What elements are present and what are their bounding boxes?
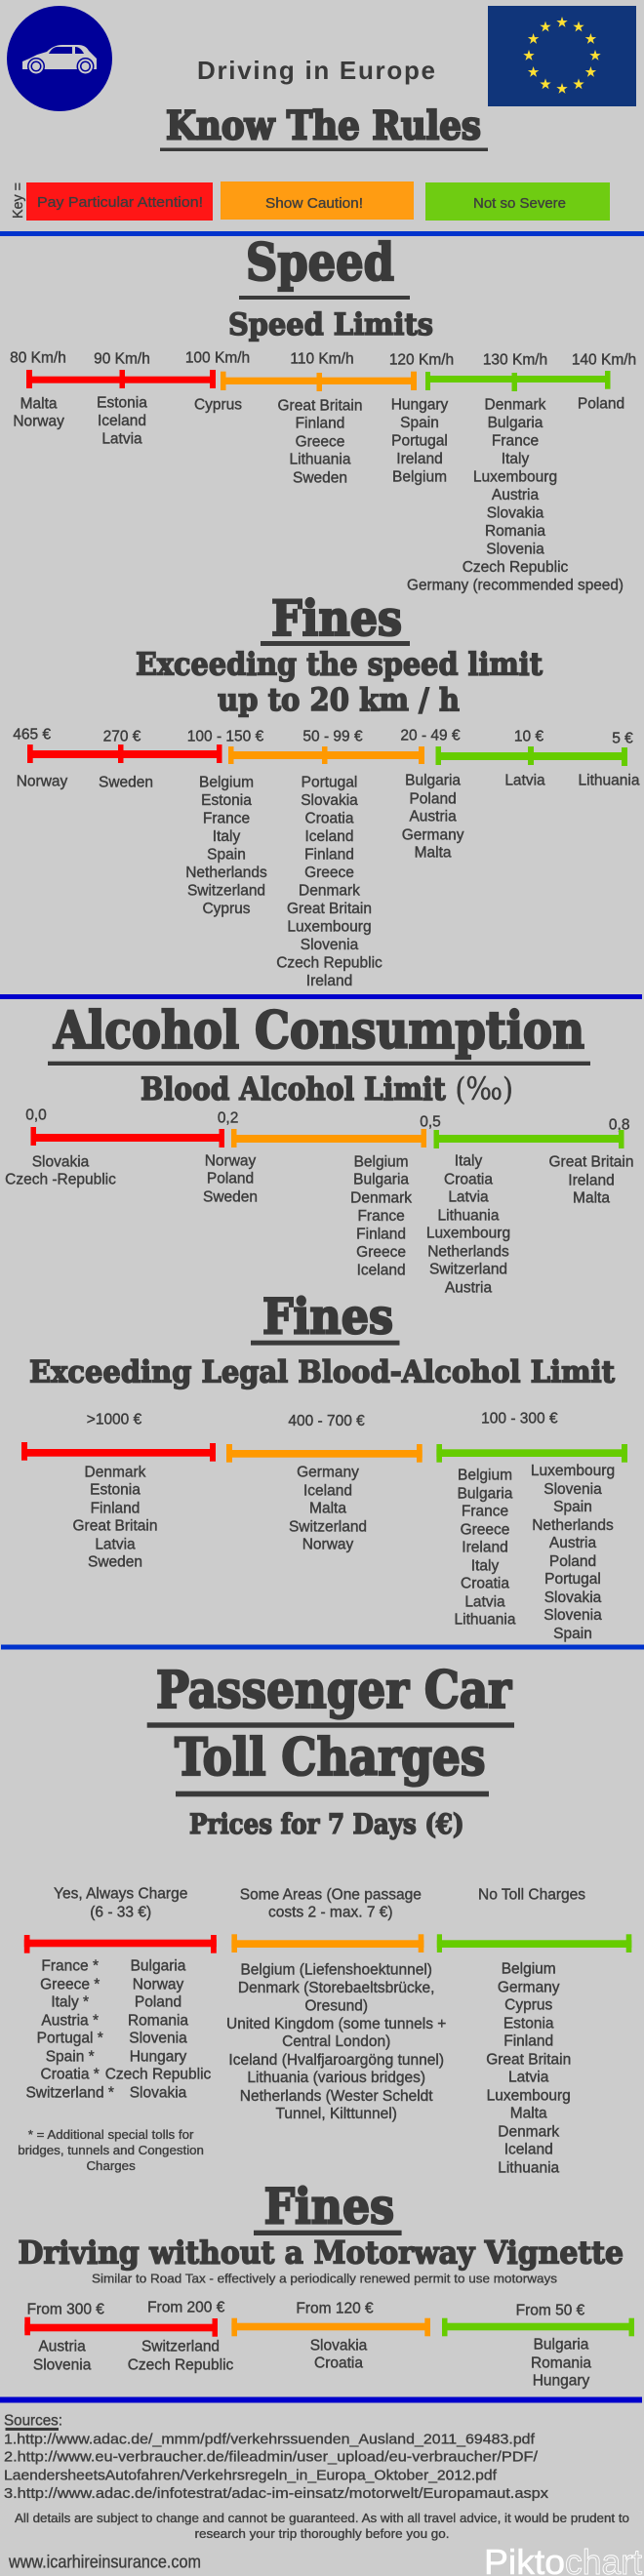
countries: 130 km/h: Denmark (485, 397, 546, 414)
countries: no toll charges: Iceland (504, 2142, 553, 2158)
logo: Piktochart (484, 2542, 642, 2576)
countries: 50-99 euro: Ireland (306, 973, 352, 989)
key label: Key = (10, 182, 26, 219)
countries: no toll charges: Cyprus (504, 1997, 552, 2014)
scale labels: speed fines: 5 € (612, 731, 633, 747)
countries: 270 euro: Sweden (99, 775, 153, 791)
countries: 130 km/h: Czech Republic (463, 559, 569, 576)
countries: 100-300 euro right: Poland (549, 1553, 596, 1570)
countries: 80 km/h: Malta (20, 395, 58, 412)
countries: 110 km/h: Great Britain (277, 397, 363, 414)
countries: 0.5 orange: France (357, 1208, 405, 1225)
key: show caution: Show Caution! (265, 195, 363, 212)
countries: from 120 euro: Slovakia (310, 2338, 368, 2355)
bar: red toll charges (24, 1935, 217, 1953)
scale labels: speed limits: 130 Km/h (483, 352, 547, 369)
countries: 110 km/h: Sweden (293, 469, 347, 486)
scale labels: speed limits (10, 350, 636, 369)
countries: no toll charges: Estonia (503, 2016, 554, 2032)
key legend (10, 181, 610, 221)
countries: 0.2: Poland (207, 1171, 254, 1187)
countries: 100-300 euro left: France (462, 1504, 508, 1520)
countries: 90 km/h: Latvia (101, 430, 142, 447)
countries: 130 km/h: Germany (recommended speed) (407, 578, 624, 594)
countries: no toll charges: Luxembourg (487, 2088, 571, 2104)
countries: 120 km/h: Portugal (391, 433, 448, 450)
text: website: www.icarhireinsurance.com (8, 2553, 201, 2572)
countries: always charge: Hungary (130, 2049, 187, 2065)
key: show caution (221, 181, 414, 220)
subheading: Exceeding the speed limit: Exceeding the speed limit (136, 646, 543, 683)
scale labels: alcohol fines: 100 - 300 € (481, 1410, 558, 1427)
scale labels: speed limits: 100 Km/h (185, 350, 250, 367)
text: source links: 1.http://www.adac.de/_mmm/pdf/verkehrssuenden_Ausland_2011_69483.pdf (4, 2431, 536, 2447)
countries: always charge with special tolls: Portugal * (37, 2030, 103, 2047)
countries: 0.0: Czech -Republic (5, 1172, 116, 1188)
column labels: toll charges: Yes, Always Charge (54, 1886, 187, 1903)
countries: always charge: Romania (128, 2012, 188, 2030)
countries: 20-49 euro: Poland (409, 790, 457, 808)
countries: 100-150 euro: France (203, 811, 250, 827)
scale labels: alcohol limit: 0,5 (420, 1114, 441, 1131)
countries: 0.5 orange: Finland (356, 1227, 406, 1243)
countries: always charge: Czech Republic (105, 2067, 212, 2082)
countries: over 1000 euro: Sweden (88, 1554, 142, 1571)
scale labels: vignette fines: From 120 € (296, 2301, 374, 2317)
countries: 130 km/h: Bulgaria (488, 415, 543, 431)
countries: 0.8: Malta (573, 1190, 610, 1207)
countries: from 50 euro: Bulgaria (534, 2337, 589, 2354)
countries: 20-49 euro: Bulgaria (405, 773, 461, 789)
subheading: Prices for 7 Days: Prices for 7 Days (€) (189, 1808, 464, 1840)
countries: some areas: Central London) (282, 2033, 390, 2050)
bar: orange speed fines (228, 746, 424, 764)
heading: Know The Rules: Know The Rules (166, 103, 481, 148)
countries: 0.5 orange: Greece (356, 1244, 406, 1261)
countries: 130 km/h: Slovenia (486, 542, 544, 558)
countries: 0.5 green: Austria (445, 1279, 492, 1296)
countries: 100-300 euro right: Austria (549, 1535, 596, 1551)
bar: green speed fines (435, 746, 627, 766)
countries: no toll charges: Malta (510, 2106, 547, 2122)
panel: sources (4, 2413, 642, 2576)
countries: from 120 euro: Croatia (314, 2355, 363, 2372)
countries: 100-150 euro: Estonia (201, 792, 252, 809)
countries: 400-700 euro: Iceland (303, 1482, 352, 1499)
key: pay particular attention (26, 182, 213, 221)
countries: always charge with special tolls: Greece * (40, 1977, 100, 1992)
countries: always charge: Bulgaria (131, 1958, 186, 1975)
bar: orange alcohol fines (226, 1444, 423, 1463)
countries: over 1000 euro: Latvia (95, 1537, 136, 1553)
countries: 0.0: Slovakia (32, 1154, 90, 1171)
countries: 130 km/h: Slovakia (487, 505, 544, 522)
key: not so severe: Not so Severe (473, 195, 566, 212)
countries: 90 km/h: Iceland (98, 413, 146, 429)
footnote: special tolls: bridges, tunnels and Congestion (18, 2143, 204, 2157)
heading: Passenger Car: Passenger Car (156, 1661, 512, 1720)
text: disclaimer (15, 2511, 629, 2541)
countries: 50-99 euro: Greece (304, 865, 354, 881)
countries: 130 km/h: Luxembourg (473, 469, 557, 486)
scale labels: vignette fines: From 50 € (516, 2303, 585, 2319)
countries: no toll charges: Great Britain (486, 2051, 571, 2069)
countries: 50-99 euro: Finland (304, 847, 354, 864)
countries: some areas: Tunnel, Kilttunnel) (276, 2106, 397, 2122)
countries: 50-99 euro: Slovenia (301, 937, 359, 953)
countries: 100-300 euro left: Latvia (464, 1594, 505, 1610)
bar: orange vignette fines (231, 2318, 430, 2336)
countries: 120 km/h: Belgium (392, 469, 447, 486)
countries: 20-49 euro: Germany (402, 827, 464, 843)
countries: 100-300 euro right: Slovakia (544, 1590, 602, 1606)
countries: 465 euro: Norway (17, 774, 68, 790)
countries: from 200 euro: Czech Republic (128, 2357, 234, 2374)
countries: 130 km/h: Romania (485, 523, 545, 540)
countries: no toll charges: Belgium (502, 1961, 556, 1978)
countries: 0.5 green: Croatia (444, 1171, 493, 1187)
countries: always charge: Norway (133, 1977, 184, 1992)
countries: 100-150 euro: Spain (207, 847, 246, 864)
text: source links: 3.http://www.adac.de/infotestrat/adac-im-einsatz/motorwelt/Europamaut.aspx (4, 2485, 549, 2502)
countries: always charge with special tolls: Spain * (46, 2049, 95, 2065)
countries: 0.5 orange: Iceland (357, 1263, 406, 1279)
countries: 100-300 euro left: Lithuania (455, 1612, 516, 1629)
panel: passenger car toll charges (18, 1661, 634, 2390)
countries: 400-700 euro: Malta (309, 1501, 346, 1517)
countries: 50-99 euro: Czech Republic (276, 955, 382, 972)
countries: 100-300 euro right: Slovenia (543, 1481, 602, 1498)
scale labels: speed limits: 90 Km/h (94, 351, 150, 368)
scale labels: alcohol limit: 0,2 (218, 1110, 238, 1127)
countries: no toll charges: Germany (498, 1979, 560, 1996)
countries: 0.5 green: Latvia (448, 1189, 489, 1206)
subheading: Speed Limits: Speed Limits (228, 307, 433, 342)
panel: alcohol consumption (5, 1001, 634, 1642)
countries: 100-300 euro right: Spain (553, 1499, 592, 1515)
countries: 120 km/h: Ireland (396, 451, 443, 467)
countries: no toll charges: Lithuania (498, 2160, 560, 2176)
heading: Speed: Speed (246, 233, 394, 293)
countries: 100-300 euro right: Netherlands (532, 1517, 614, 1534)
countries: no toll charges: Finland (503, 2033, 553, 2050)
column labels: toll charges: No Toll Charges (478, 1887, 585, 1904)
countries: 100-300 euro left: Italy (471, 1557, 499, 1575)
subheading: Blood Alcohol Limit: Blood Alcohol Limit (‰) (141, 1070, 513, 1107)
bar: green alcohol limit (433, 1130, 624, 1148)
scale labels: alcohol limit: 0,0 (25, 1107, 47, 1124)
countries: 90 km/h: Estonia (97, 395, 147, 412)
countries: some areas: Belgium (Liefenshoektunnel) (240, 1961, 432, 1978)
scale labels: speed limits: 120 Km/h (389, 352, 454, 369)
bar: red alcohol limit (31, 1127, 224, 1147)
countries: 0.2: Norway (205, 1153, 257, 1170)
key: pay particular attention: Pay Particular Attention! (37, 194, 203, 211)
scale labels: speed limits: 80 Km/h (10, 350, 66, 367)
countries: 100-300 euro left: Belgium (458, 1468, 512, 1484)
footnote: special tolls: * = Additional special tolls for (28, 2127, 194, 2142)
column labels: toll charges: Some Areas (One passage (240, 1887, 422, 1904)
column labels: toll charges (54, 1886, 585, 1921)
scale labels: speed fines (13, 727, 633, 747)
countries: 80 km/h: Norway (13, 413, 64, 429)
bar: green toll charges (437, 1934, 631, 1952)
text: source links (4, 2431, 549, 2502)
countries: 0.5 green: Switzerland (429, 1261, 507, 1278)
title: Driving in Europe: Driving in Europe (197, 56, 435, 85)
countries: always charge: Poland (135, 1994, 181, 2010)
countries: 100-300 euro right: Spain (553, 1626, 592, 1642)
countries: 130 km/h: Austria (492, 487, 539, 503)
key: not so severe (425, 182, 610, 221)
countries: 100-150 euro: Cyprus (202, 901, 251, 917)
countries: 400-700 euro: Switzerland (289, 1518, 367, 1535)
heading: Toll Charges: Toll Charges (175, 1728, 486, 1788)
scale labels: alcohol limit (25, 1107, 629, 1134)
countries: some areas: Lithuania (various bridges) (247, 2070, 425, 2086)
countries: 130 km/h: France (492, 433, 539, 450)
countries: no toll charges: Latvia (508, 2070, 549, 2086)
text: disclaimer: research your trip thoroughly before you go. (195, 2526, 449, 2541)
countries: 120 km/h: Spain (400, 415, 439, 431)
bar: green alcohol fines (436, 1444, 627, 1463)
countries: 110 km/h: Greece (296, 433, 344, 450)
panel: speed (10, 233, 640, 989)
scale labels: speed fines: 100 - 150 € (187, 729, 264, 745)
icon: car in blue circle (7, 6, 112, 111)
countries: over 1000 euro: Estonia (90, 1482, 141, 1499)
scale labels: speed fines: 50 - 99 € (302, 729, 363, 745)
countries: 110 km/h: Lithuania (290, 451, 351, 468)
countries: 100 km/h: Cyprus (194, 397, 242, 414)
scale labels: speed fines: 10 € (514, 729, 543, 745)
text: source links: 2.http://www.eu-verbraucher.de/fileadmin/user_upload/eu-verbraucher/PDF/ (4, 2448, 539, 2465)
scale labels: speed limits: 110 Km/h (290, 351, 354, 368)
scale labels: alcohol fines (87, 1410, 558, 1429)
countries: 130 km/h: Italy (502, 451, 529, 467)
countries: 400-700 euro: Germany (297, 1465, 359, 1481)
countries: 110 km/h: Finland (296, 416, 344, 432)
heading: Fines (vignette): Fines (264, 2178, 394, 2235)
text: disclaimer: All details are subject to change and cannot be guaranteed. As with all travel advice, it would be prudent to (15, 2511, 629, 2525)
countries: 100-150 euro: Switzerland (187, 883, 265, 900)
countries: 100-300 euro left: Ireland (462, 1540, 508, 1556)
scale labels: speed fines: 20 - 49 € (400, 728, 461, 745)
scale labels: vignette fines: From 300 € (27, 2302, 104, 2318)
countries: over 1000 euro: Great Britain (72, 1518, 158, 1535)
countries: 50-99 euro: Great Britain (287, 901, 372, 917)
scale labels: speed fines: 465 € (13, 727, 51, 744)
bar: red alcohol fines (21, 1442, 216, 1462)
bar: red speed limits (26, 370, 216, 388)
countries: 0.5 green: Lithuania (438, 1207, 500, 1224)
countries: some areas: United Kingdom (some tunnels + (226, 2016, 446, 2033)
countries: 0.5 green: Luxembourg (426, 1226, 510, 1242)
countries: 100-300 euro right: Luxembourg (531, 1463, 615, 1479)
scale labels: alcohol fines: >1000 € (87, 1411, 142, 1428)
countries: 50-99 euro: Denmark (299, 883, 360, 900)
countries: always charge with special tolls: Italy * (51, 1994, 89, 2010)
countries: 10 euro: Latvia (504, 773, 545, 789)
countries: some areas: Iceland (Hvalfjaroargöng tunnel) (228, 2052, 444, 2069)
countries: always charge: Slovenia (129, 2030, 187, 2047)
countries: 120 km/h: Hungary (391, 397, 449, 414)
scale labels: speed fines: 270 € (103, 729, 141, 745)
bar: green speed limits (425, 371, 611, 391)
countries: over 1000 euro: Finland (91, 1501, 140, 1517)
subheading: Exceeding the speed limit: up to 20 km / h (218, 681, 460, 718)
countries: from 50 euro: Hungary (533, 2373, 590, 2390)
countries: 50-99 euro: Croatia (305, 811, 354, 827)
text: road tax explanation: Similar to Road Tax - effectively a periodically renewed permit to use motorways (92, 2271, 557, 2285)
heading: Sources: Sources: (4, 2413, 62, 2430)
countries: 0.2: Sweden (203, 1189, 258, 1206)
countries: 100-300 euro left: Bulgaria (458, 1485, 513, 1503)
countries: 0.5 green: Netherlands (427, 1243, 509, 1260)
countries: always charge: Slovakia (130, 2084, 187, 2102)
countries: 400-700 euro: Norway (302, 1537, 354, 1553)
countries: always charge with special tolls: Croatia * (41, 2067, 100, 2082)
subheading: Exceeding Legal Blood-Alcohol Limit: Exceeding Legal Blood-Alcohol Limit (29, 1355, 616, 1390)
column labels: toll charges: (6 - 33 €) (90, 1904, 151, 1920)
bar: red speed fines (27, 745, 222, 763)
bar: red vignette fines (24, 2317, 218, 2337)
scale labels: alcohol fines: 400 - 700 € (288, 1413, 365, 1429)
countries: always charge with special tolls: Switzerland * (25, 2084, 114, 2102)
heading: Fines (speed): Fines (271, 589, 402, 647)
countries: some areas: Denmark (Storebaeltsbrücke, (238, 1980, 434, 1996)
countries: 100-300 euro left: Croatia (461, 1576, 509, 1592)
countries: 5 euro: Lithuania (579, 773, 640, 789)
countries: from 300 euro: Austria (38, 2339, 86, 2355)
scale labels: vignette fines (27, 2300, 585, 2319)
countries: 0.5 orange: Denmark (350, 1190, 412, 1207)
countries: always charge with special tolls: Austria * (41, 2012, 99, 2030)
countries: always charge with special tolls: France * (41, 1958, 99, 1975)
countries: from 50 euro: Romania (531, 2355, 591, 2372)
countries: 0.5 orange: Bulgaria (353, 1172, 409, 1188)
countries: 100-150 euro: Netherlands (185, 865, 267, 881)
countries: 20-49 euro: Austria (409, 809, 457, 825)
bar: green vignette fines (442, 2318, 634, 2336)
countries: from 300 euro: Slovenia (33, 2357, 92, 2374)
countries: 20-49 euro: Malta (415, 845, 452, 862)
countries: 0.5 green: Italy (455, 1153, 482, 1170)
footnote: special tolls: Charges (86, 2158, 136, 2173)
heading: Fines (alcohol): Fines (262, 1288, 393, 1346)
subheading: Exceeding the speed limit (136, 646, 543, 718)
countries: 0.5 orange: Belgium (354, 1154, 409, 1171)
scale labels: alcohol limit: 0,8 (609, 1117, 629, 1134)
bar: orange alcohol limit (231, 1129, 426, 1147)
countries: 50-99 euro: Iceland (305, 828, 353, 845)
countries: no toll charges: Denmark (498, 2123, 559, 2141)
countries: some areas: Oresund) (304, 1997, 368, 2014)
icon: EU flag (488, 6, 636, 106)
countries: 0.8: Ireland (568, 1173, 615, 1188)
text: source links: LaendersheetsAutofahren/Verkehrsregeln_in_Europa_Oktober_2012.pdf (4, 2468, 498, 2484)
countries: 100-300 euro right: Slovenia (543, 1607, 602, 1624)
bar: orange speed limits (221, 372, 417, 391)
scale labels: speed limits: 140 Km/h (572, 352, 636, 369)
countries: some areas: Netherlands (Wester Scheldt (240, 2088, 433, 2105)
countries: 100-150 euro: Belgium (199, 775, 254, 791)
countries: over 1000 euro: Denmark (85, 1465, 146, 1481)
countries: 50-99 euro: Luxembourg (287, 919, 372, 936)
countries: 100-300 euro left: Greece (461, 1522, 509, 1538)
countries: 0.8: Great Britain (548, 1154, 634, 1171)
countries: 50-99 euro: Slovakia (301, 792, 358, 809)
scale labels: vignette fines: From 200 € (147, 2300, 225, 2316)
countries: 100-150 euro: Italy (213, 828, 240, 845)
countries: 100-300 euro right: Portugal (544, 1571, 601, 1588)
countries: from 200 euro: Switzerland (141, 2339, 220, 2355)
column labels: toll charges: costs 2 - max. 7 €) (268, 1905, 393, 1921)
countries: 140 km/h: Poland (578, 395, 624, 412)
countries: 50-99 euro: Portugal (302, 775, 357, 791)
bar: orange toll charges (231, 1934, 423, 1952)
